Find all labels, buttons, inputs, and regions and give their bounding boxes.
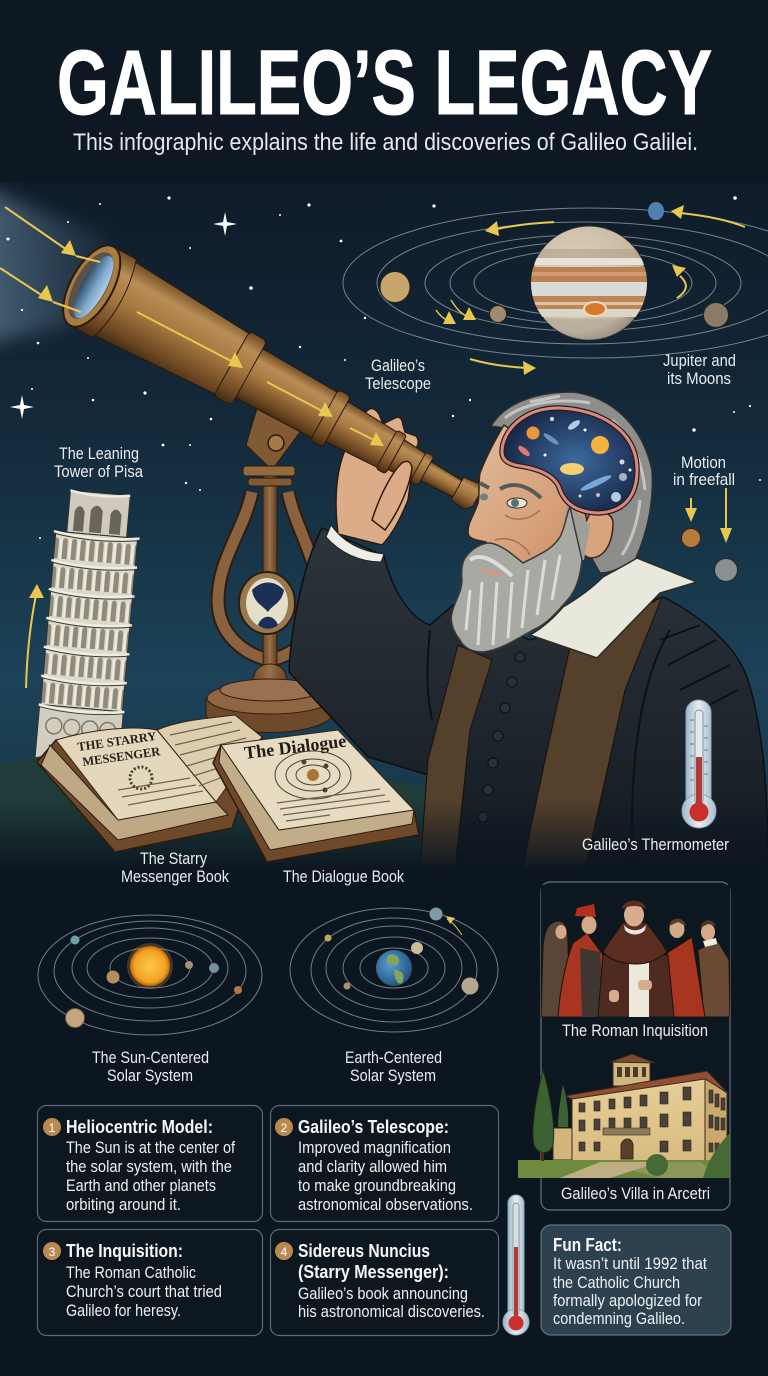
- header band: [0, 0, 768, 182]
- brown friar right: [698, 940, 730, 1017]
- grey beard: [451, 507, 582, 652]
- card 1: Heliocentric Model: The Sun is at the center of: [66, 1138, 235, 1157]
- orbit direction arrows: [436, 205, 745, 375]
- illustration: villa in Arcetri: [518, 1054, 730, 1178]
- label: Motion in freefall: in freefall: [673, 470, 735, 489]
- label: Motion in freefall: Motion: [681, 453, 726, 472]
- fun fact box: [541, 1225, 731, 1335]
- card 2: Galileo's Telescope: Improved magnification: [298, 1138, 451, 1157]
- label: Starry Messenger Book: [121, 849, 229, 886]
- Jupiter: [531, 226, 647, 341]
- book: The Starry Messenger: THE STARRY: [76, 729, 157, 754]
- card 3: The Inquisition: [38, 1230, 262, 1336]
- card 2: Galileo's Telescope: astronomical observations.: [298, 1195, 473, 1214]
- illustration: Roman Inquisition: [541, 885, 730, 1017]
- brain window: [502, 408, 637, 513]
- robe and body: [289, 525, 768, 870]
- label: Villa in Arcetri: Galileo’s Villa in Arcetri: [561, 1184, 710, 1203]
- label: Thermometer: Galileo’s Thermometer: [582, 835, 729, 854]
- book: The Dialogue: The Dialogue: [243, 731, 347, 763]
- hair: [491, 392, 652, 573]
- label: Earth-Centered: Solar System: [350, 1066, 436, 1085]
- far eye: [480, 494, 488, 500]
- side hair: [563, 503, 590, 560]
- label: Galileo's Telescope: Telescope: [365, 374, 431, 393]
- label: Jupiter and its Moons: [663, 351, 736, 388]
- card 3: The Inquisition: 3: [49, 1245, 56, 1259]
- white collar: [530, 558, 697, 658]
- right image panel: [541, 882, 730, 1210]
- incoming light rays: [0, 207, 100, 312]
- label: Jupiter and its Moons: Jupiter and: [663, 351, 736, 370]
- sparkle stars: [10, 212, 237, 419]
- card 4: Sidereus Nuncius: [270, 1230, 498, 1336]
- thermometer icon upper: [682, 700, 716, 828]
- diagram: sun-centered system: [38, 915, 262, 1035]
- label: Motion in freefall: [673, 453, 735, 489]
- hill: [0, 756, 426, 854]
- telescope: [62, 244, 478, 510]
- label: Sun-Centered: Solar System: [107, 1066, 193, 1085]
- central inquisitor: [598, 955, 674, 1017]
- label: Galileo's Telescope: [365, 356, 431, 393]
- rays inside telescope: [137, 312, 384, 446]
- card 3: The Inquisition: Galileo for heresy.: [66, 1301, 181, 1320]
- card 3: The Inquisition: The Roman Catholic: [66, 1263, 196, 1282]
- label: Leaning Tower: [54, 444, 143, 481]
- shoulder pleats: [426, 624, 738, 832]
- lips: [480, 567, 503, 577]
- card 4: Sidereus Nuncius: 4: [281, 1245, 288, 1259]
- fun fact box: Fun Fact:: [553, 1234, 622, 1255]
- card 4: Sidereus Nuncius: (Starry Messenger):: [298, 1261, 449, 1282]
- card 4: Sidereus Nuncius: Galileo’s book announcing: [298, 1284, 468, 1303]
- card 1: Heliocentric Model: 1: [49, 1121, 56, 1135]
- label: Leaning Tower: Tower of Pisa: [54, 462, 143, 481]
- label: Sun-Centered: The Sun-Centered: [92, 1048, 209, 1067]
- face: [467, 424, 587, 562]
- hand behind telescope: [336, 408, 418, 545]
- card 4: Sidereus Nuncius: Sidereus Nuncius: [298, 1240, 430, 1261]
- card 1: Heliocentric Model: orbiting around it.: [66, 1195, 181, 1214]
- card 2: Galileo's Telescope: and clarity allowed him: [298, 1157, 447, 1176]
- card 3: The Inquisition: Church’s court that tried: [66, 1282, 222, 1301]
- book: The Dialogue: [213, 730, 419, 862]
- label: Jupiter and its Moons: its Moons: [667, 369, 731, 388]
- card 1: Heliocentric Model: [38, 1106, 262, 1222]
- card 2: Galileo's Telescope: Galileo’s Telescope:: [298, 1116, 449, 1137]
- card 1: Heliocentric Model: the solar system, with the: [66, 1157, 232, 1176]
- card 3: The Inquisition: The Inquisition:: [66, 1240, 183, 1261]
- orbit rings around Jupiter: [343, 208, 768, 358]
- label: Galileo's Telescope: Galileo’s: [371, 356, 425, 375]
- fun fact box: It wasn’t until 1992 that: [553, 1254, 707, 1273]
- cuff: [326, 525, 384, 562]
- card 2: Galileo's Telescope: 2: [281, 1121, 288, 1135]
- label: Leaning Tower: The Leaning: [59, 444, 139, 463]
- card 4: Sidereus Nuncius: his astronomical discoveries.: [298, 1302, 485, 1321]
- eyebrow: [480, 483, 541, 498]
- red friar: [667, 937, 705, 1017]
- label: Sun-Centered: [92, 1048, 209, 1085]
- subtitle: This infographic explains the life and discoveries of Galileo Galilei.: [73, 129, 698, 156]
- book: The Starry Messenger: [37, 715, 262, 852]
- falling objects: [682, 488, 738, 582]
- label: Starry Messenger Book: The Starry: [140, 849, 207, 868]
- nun: [541, 921, 570, 1017]
- thumb over telescope: [372, 461, 412, 530]
- diagram: earth-centered system: [290, 908, 498, 1032]
- Galileo's head: [451, 392, 697, 658]
- light beam: [0, 185, 112, 345]
- card 2: Galileo's Telescope: [270, 1106, 498, 1222]
- eye: [507, 498, 527, 508]
- card 1: Heliocentric Model: Earth and other planets: [66, 1176, 216, 1195]
- night sky scene: [0, 182, 768, 872]
- rising arrow beside tower: [26, 584, 44, 688]
- fun fact box: condemning Galileo.: [553, 1309, 685, 1328]
- label: Earth-Centered: [345, 1048, 442, 1085]
- card 1: Heliocentric Model: Heliocentric Model:: [66, 1116, 213, 1137]
- tower of Pisa: [34, 489, 143, 766]
- ear: [584, 514, 614, 559]
- stars: [6, 196, 761, 539]
- label: Earth-Centered: Earth-Centered: [345, 1048, 442, 1067]
- cardinal: [558, 933, 603, 1017]
- book: The Starry Messenger: MESSENGER: [81, 744, 162, 769]
- telescope stand: [206, 405, 333, 732]
- brown stoles: [420, 645, 492, 870]
- thermometer icon lower: [503, 1195, 529, 1335]
- card 2: Galileo's Telescope: to make groundbreaking: [298, 1176, 456, 1195]
- cheek lines: [495, 510, 540, 555]
- label: Starry Messenger Book: Messenger Book: [121, 867, 229, 886]
- label: Dialogue Book: The Dialogue Book: [283, 867, 404, 886]
- fun fact box: formally apologized for: [553, 1291, 702, 1310]
- buttons: [478, 652, 525, 822]
- fun fact box: the Catholic Church: [553, 1273, 680, 1292]
- label: Roman Inquisition: The Roman Inquisition: [562, 1021, 708, 1040]
- Jupiter's moons: [380, 202, 728, 328]
